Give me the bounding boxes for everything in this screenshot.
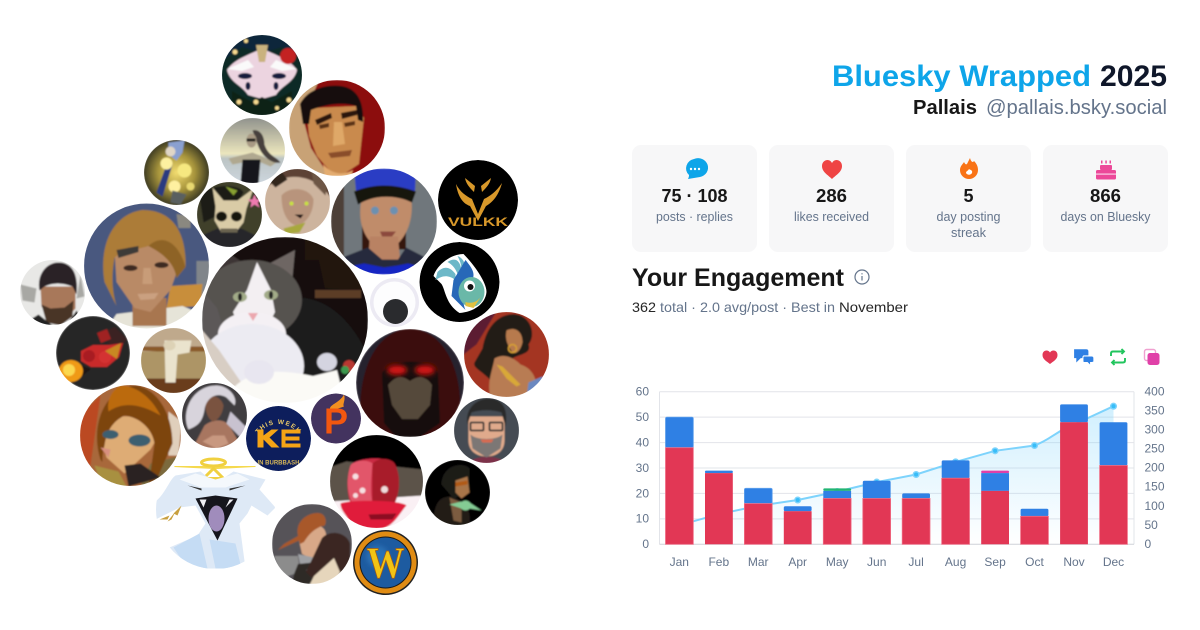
month labels: Nov: [1063, 555, 1085, 569]
bar: Nov: [1060, 404, 1088, 544]
badge ring text: THIS WEEK: [254, 419, 302, 432]
avatar: figure holding baby alien: [424, 460, 490, 526]
month labels: Jun: [867, 555, 886, 569]
avatar cluster: [20, 35, 549, 595]
avatar: man in beanie: [20, 260, 86, 326]
stat value: 75 · 108: [662, 186, 728, 206]
engagement chart: [636, 384, 1165, 569]
right axis labels: 300: [1144, 422, 1165, 436]
cumulative area: [679, 406, 1114, 544]
stat label: likes received: [794, 210, 869, 224]
icon: like: [1042, 350, 1058, 364]
bar: May: [823, 488, 851, 544]
legend: [1042, 349, 1160, 366]
bar: Sep: [981, 471, 1009, 544]
icon: info: [855, 270, 869, 284]
month labels: Aug: [945, 555, 966, 569]
avatar: pixel art man with glasses: [454, 398, 520, 464]
stat label: posts · replies: [656, 210, 733, 224]
user name and handle: @pallais.bsky.social: [986, 97, 1167, 119]
bar: Feb: [705, 471, 733, 544]
avatar: flame P logo: [311, 394, 361, 444]
bar: Mar: [744, 488, 772, 544]
chart grid: [660, 392, 1134, 544]
panel: likes received: [769, 145, 894, 252]
avatar: Spock portrait: [289, 80, 385, 176]
cumulative points: [795, 403, 1116, 503]
month labels: Jan: [670, 555, 689, 569]
avatar: blonde game character: [84, 203, 210, 329]
title: 2025: [1100, 60, 1167, 93]
month labels: May: [826, 555, 849, 569]
avatar: elf with green eyes: [264, 168, 330, 234]
icon: heart: [822, 160, 842, 179]
avatar: googly eye: [370, 278, 419, 327]
month labels: Dec: [1103, 555, 1124, 569]
logo letter: P: [324, 400, 348, 442]
avatar: woman at sea: [220, 118, 286, 184]
left axis labels: 50: [636, 410, 649, 424]
badge lower text: IN BURBBASH: [258, 460, 300, 466]
avatar: horned skull: [196, 182, 262, 248]
icon: reposts: [1111, 349, 1125, 365]
right axis labels: 0: [1144, 537, 1152, 551]
left axis labels: 60: [636, 384, 649, 398]
right axis labels: 250: [1144, 442, 1165, 456]
engagement summary: 362: [632, 299, 656, 315]
left axis labels: 30: [636, 461, 649, 475]
stat value: 286: [816, 186, 847, 206]
right axis labels: 50: [1144, 518, 1158, 532]
avatar: tabby and white cat: [200, 237, 368, 408]
left axis labels: 20: [636, 486, 649, 500]
bar: Dec: [1100, 422, 1127, 544]
avatar: golden character: [144, 140, 210, 206]
bar: Jan: [666, 417, 693, 544]
icon: quotes: [1144, 350, 1160, 365]
bar: Aug: [942, 460, 970, 544]
stat value: 5: [963, 186, 974, 206]
right axis labels: 200: [1144, 460, 1165, 474]
avatar: red-haired couple: [272, 504, 352, 584]
left axis labels: 40: [636, 436, 649, 450]
right axis labels: 100: [1144, 499, 1165, 513]
icon: flame: [960, 158, 978, 179]
avatar: Vulkk logo: [438, 160, 518, 240]
avatar: fox character: [80, 384, 182, 488]
bar: Jun: [863, 481, 891, 544]
cumulative line: [679, 406, 1114, 525]
logo letter: W: [366, 538, 404, 588]
panel: day posting streak: [906, 145, 1031, 252]
engagement summary: November: [839, 299, 908, 315]
avatar: red-hooded figure: [356, 329, 464, 437]
left axis labels: [636, 384, 649, 551]
icon: replies: [1074, 349, 1094, 366]
stat label: [936, 210, 1001, 240]
icon: birthday cake: [1096, 160, 1116, 180]
user name and handle: Pallais: [913, 97, 977, 119]
bar: Jul: [902, 493, 930, 544]
month labels: Oct: [1025, 555, 1044, 569]
stat label: day posting: [936, 210, 1001, 224]
stat label: streak: [951, 226, 987, 240]
panel: days on Bluesky: [1043, 145, 1168, 252]
avatar: white-haired elf: [182, 382, 248, 448]
stat value: 866: [1090, 186, 1121, 206]
right axis labels: 150: [1144, 480, 1165, 494]
panel: posts and replies: [632, 145, 757, 252]
title: Bluesky Wrapped: [832, 60, 1091, 93]
month labels: Jul: [908, 555, 924, 569]
right axis labels: 400: [1144, 384, 1165, 398]
icon: speech bubble: [686, 158, 708, 179]
stat label: days on Bluesky: [1060, 210, 1151, 224]
bar: Apr: [784, 506, 812, 544]
engagement summary: total · 2.0 avg/post · Best in: [660, 299, 835, 315]
month labels: Apr: [788, 555, 807, 569]
heading: Your Engagement: Your Engagement: [632, 264, 845, 292]
engagement summary: [632, 299, 908, 315]
avatar: This Week in badge: [246, 406, 311, 471]
avatar: Sims character with blue hat: [331, 168, 437, 274]
month labels: Sep: [984, 555, 1006, 569]
right axis labels: 350: [1144, 404, 1165, 418]
avatar: stretched white cat: [140, 328, 206, 394]
left axis labels: 10: [636, 512, 649, 526]
right axis labels: [1144, 384, 1165, 551]
avatar: woman in gold jewelry: [464, 312, 550, 398]
avatar: Warcraft logo: [353, 530, 418, 595]
avatar: red ladybug creature: [56, 316, 130, 390]
avatar: melting red die: [330, 434, 424, 528]
left axis labels: 0: [642, 537, 649, 551]
logo word: VULKK: [448, 215, 508, 229]
month labels: Feb: [708, 555, 729, 569]
avatar: hooded parrot: [420, 242, 500, 322]
month labels: Mar: [748, 555, 769, 569]
month labels: [670, 555, 1124, 569]
bar: Oct: [1021, 509, 1048, 544]
stacked bars: [666, 404, 1127, 544]
avatar: white dragon with halo: [156, 450, 276, 569]
avatar: festive mask: [221, 34, 303, 116]
